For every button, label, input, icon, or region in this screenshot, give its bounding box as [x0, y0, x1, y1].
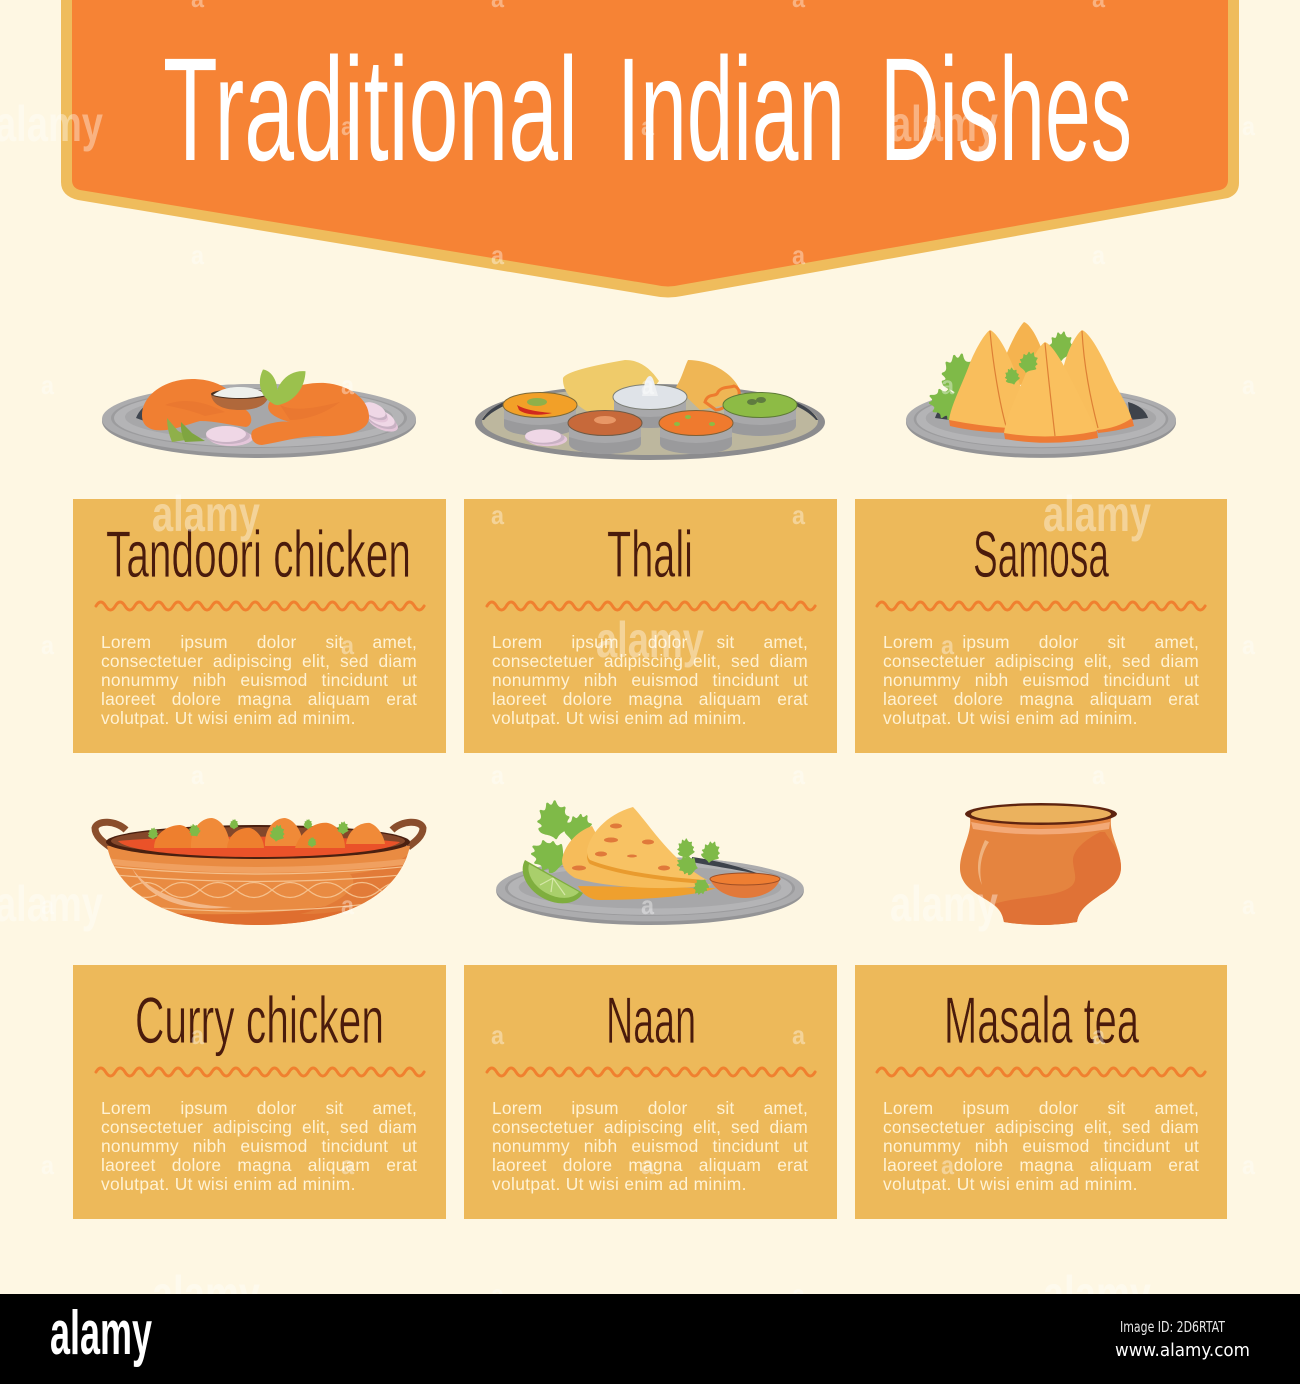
watermark overlay: a — [191, 1020, 204, 1050]
card: samosa: laoreet dolore magna aliquam erat — [883, 689, 1199, 709]
dish: masala tea — [960, 803, 1121, 925]
watermark overlay: a — [491, 1020, 504, 1050]
lime wedge — [523, 860, 583, 903]
yellow dal bowl — [503, 392, 577, 436]
watermark overlay: a — [792, 240, 805, 270]
card: thali: laoreet dolore magna aliquam erat — [492, 689, 808, 709]
garnish — [148, 819, 348, 847]
card: curry chicken — [73, 965, 446, 1219]
card: tandoori chicken: consectetuer adipiscing elit, sed diam — [101, 651, 417, 671]
watermark overlay: alamy — [890, 96, 998, 152]
card: curry chicken: Lorem ipsum dolor sit amet, — [101, 1098, 417, 1118]
footer logo: alamy — [50, 1299, 152, 1368]
watermark overlay: a — [41, 1150, 54, 1180]
card: naan: consectetuer adipiscing elit, sed diam — [492, 1117, 808, 1137]
card: samosa — [855, 499, 1227, 753]
dip bowl — [710, 873, 780, 898]
watermark overlay: a — [641, 370, 654, 400]
title: Traditional — [163, 28, 578, 192]
watermark overlay: a — [941, 370, 954, 400]
dish: naan — [496, 800, 804, 925]
samosa pieces — [949, 322, 1134, 443]
watermark overlay: a — [641, 1150, 654, 1180]
brown curry bowl — [568, 410, 642, 454]
card: thali: volutpat. Ut wisi enim ad minim. — [492, 708, 747, 728]
dish: samosa — [906, 322, 1176, 458]
card: naan: laoreet dolore magna aliquam erat — [492, 1155, 808, 1175]
card: thali: Thali — [607, 517, 693, 591]
card: masala tea: nonummy nibh euismod tincidunt ut — [883, 1136, 1199, 1156]
card: masala tea — [855, 965, 1227, 1219]
food illustrations — [92, 322, 1176, 925]
dish: curry chicken — [95, 818, 423, 930]
onion slices — [525, 429, 567, 446]
green chutney bowl — [723, 392, 797, 436]
watermark overlay: a — [341, 630, 354, 660]
card: curry chicken: laoreet dolore magna aliquam erat — [101, 1155, 417, 1175]
card: samosa: nonummy nibh euismod tincidunt ut — [883, 670, 1199, 690]
pot handles — [95, 822, 423, 847]
watermark overlay: a — [1242, 630, 1255, 660]
card: curry chicken: volutpat. Ut wisi enim ad minim. — [101, 1174, 356, 1194]
watermark overlay: a — [491, 500, 504, 530]
watermark overlay: a — [1242, 111, 1255, 141]
card: tandoori chicken: laoreet dolore magna aliquam erat — [101, 689, 417, 709]
watermark overlay: a — [41, 630, 54, 660]
card: samosa: volutpat. Ut wisi enim ad minim. — [883, 708, 1138, 728]
card: naan: Lorem ipsum dolor sit amet, — [492, 1098, 808, 1118]
footer bar — [0, 1294, 1300, 1384]
coriander leaves — [926, 332, 1072, 421]
card: thali: Lorem ipsum dolor sit amet, — [492, 632, 808, 652]
banner header — [61, 0, 1239, 298]
card: thali: consectetuer adipiscing elit, sed diam — [492, 651, 808, 671]
image id: Image ID: 2D6RTAT — [1120, 1318, 1226, 1336]
watermark overlay: a — [1242, 1150, 1255, 1180]
watermark overlay: a — [792, 1020, 805, 1050]
watermark overlay: a — [941, 630, 954, 660]
watermark overlay: a — [41, 370, 54, 400]
card: curry chicken: consectetuer adipiscing elit, sed diam — [101, 1117, 417, 1137]
card: thali — [464, 499, 837, 753]
card: tandoori chicken: volutpat. Ut wisi enim ad minim. — [101, 708, 356, 728]
watermark overlay: a — [1242, 890, 1255, 920]
watermark overlay: a — [1242, 370, 1255, 400]
card: naan: Naan — [606, 983, 696, 1057]
orange curry bowl — [659, 410, 733, 454]
watermark overlay: a — [1092, 760, 1105, 790]
watermark overlay: a — [491, 240, 504, 270]
watermark overlay: a — [491, 760, 504, 790]
breads — [563, 360, 741, 413]
card: tandoori chicken: nonummy nibh euismod tincidunt ut — [101, 670, 417, 690]
watermark overlay: a — [792, 760, 805, 790]
card: curry chicken: nonummy nibh euismod tincidunt ut — [101, 1136, 417, 1156]
watermark overlay: a — [341, 890, 354, 920]
watermark overlay: a — [641, 111, 654, 141]
watermark overlay: a — [1092, 240, 1105, 270]
watermark overlay: a — [41, 890, 54, 920]
rim and sauce — [106, 825, 410, 859]
watermark overlay: a — [1092, 1020, 1105, 1050]
watermark overlay: a — [191, 760, 204, 790]
card: thali: nonummy nibh euismod tincidunt ut — [492, 670, 808, 690]
card: naan: volutpat. Ut wisi enim ad minim. — [492, 1174, 747, 1194]
naan stack — [562, 807, 716, 900]
card: tandoori chicken — [73, 499, 446, 753]
watermark overlay: a — [341, 370, 354, 400]
yoghurt bowl — [211, 387, 269, 410]
dish: tandoori chicken — [102, 367, 416, 458]
website: www.alamy.com — [1115, 1340, 1250, 1361]
watermark overlay: a — [191, 240, 204, 270]
watermark overlay: a — [792, 500, 805, 530]
watermark overlay: alamy — [1043, 486, 1151, 542]
white raita bowl — [613, 376, 687, 428]
card: samosa: Lorem ipsum dolor sit amet, — [883, 632, 1199, 652]
watermark overlay: alamy — [596, 612, 704, 668]
watermark overlay: a — [941, 1150, 954, 1180]
card: naan — [464, 965, 837, 1219]
watermark overlay: alamy — [890, 876, 998, 932]
green leaves — [167, 367, 306, 442]
title: Indian — [617, 28, 845, 192]
bowl pattern — [110, 856, 408, 925]
card: masala tea: laoreet dolore magna aliquam erat — [883, 1155, 1199, 1175]
watermark overlay: a — [641, 890, 654, 920]
watermark overlay: a — [341, 111, 354, 141]
card: samosa: Samosa — [973, 517, 1109, 591]
garnish — [675, 838, 721, 897]
card: tandoori chicken: Lorem ipsum dolor sit amet, — [101, 632, 417, 652]
coriander leaves — [527, 800, 595, 876]
dish: thali — [475, 360, 825, 460]
card: masala tea: Lorem ipsum dolor sit amet, — [883, 1098, 1199, 1118]
card: masala tea: consectetuer adipiscing elit, sed diam — [883, 1117, 1199, 1137]
onion slices — [206, 399, 402, 446]
chicken pieces — [154, 818, 385, 848]
card: naan: nonummy nibh euismod tincidunt ut — [492, 1136, 808, 1156]
watermark overlay: a — [341, 1150, 354, 1180]
watermark overlay: alamy — [152, 486, 260, 542]
card: masala tea: volutpat. Ut wisi enim ad minim. — [883, 1174, 1138, 1194]
card: samosa: consectetuer adipiscing elit, sed diam — [883, 651, 1199, 671]
